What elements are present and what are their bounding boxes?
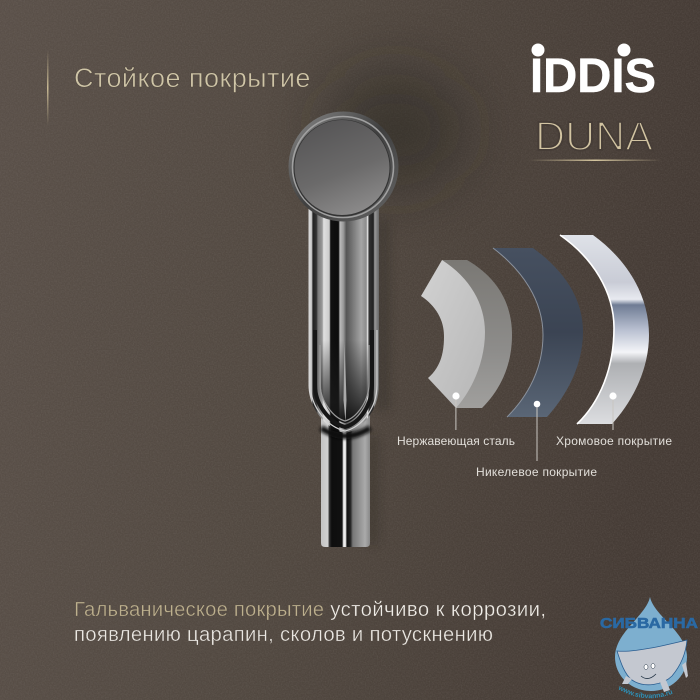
bath bbox=[617, 640, 687, 685]
drop bbox=[615, 597, 687, 691]
title accent line bbox=[47, 50, 48, 126]
url: www.sibvanna.ru bbox=[618, 686, 672, 698]
handle inner loop bbox=[320, 345, 369, 421]
layer: chrome bbox=[560, 235, 649, 424]
handle centre glint bbox=[344, 340, 346, 422]
pointer: stainless steel bbox=[452, 392, 460, 430]
description text: появлению царапин, сколов и потускнению bbox=[74, 624, 493, 646]
handle bottom core bbox=[321, 340, 369, 423]
description text bbox=[74, 599, 546, 646]
brand logo: IDDIS: IDDIS bbox=[530, 50, 656, 103]
label: nickel: Никелевое покрытие bbox=[476, 465, 597, 479]
product shadow bbox=[325, 70, 465, 545]
lower tube bbox=[321, 415, 370, 547]
head disc bbox=[294, 120, 390, 216]
shadow under handle bbox=[321, 428, 370, 436]
U-shaped handle bbox=[308, 200, 379, 433]
description text: Гальваническое покрытие устойчиво к коррозии, bbox=[74, 599, 546, 621]
bath face bbox=[641, 664, 656, 679]
product: shower head bbox=[288, 112, 398, 547]
handle outer highlight bbox=[310, 330, 377, 431]
head rim bbox=[288, 112, 398, 222]
layer: nickel bbox=[493, 248, 583, 417]
series name: DUNA: DUNA bbox=[535, 113, 653, 159]
title: Стойкое покрытие bbox=[74, 63, 311, 93]
brand name: СИБВАННА bbox=[600, 615, 698, 632]
pointer: chrome bbox=[609, 392, 617, 430]
label: stainless steel: Нержавеющая сталь bbox=[397, 434, 515, 448]
pointer: nickel bbox=[534, 401, 540, 461]
bath legs bbox=[622, 662, 688, 692]
logo divider bbox=[528, 160, 662, 161]
label: chrome: Хромовое покрытие bbox=[556, 434, 672, 448]
layer: stainless steel bbox=[421, 260, 512, 408]
watermark: Sibvanna logo bbox=[600, 597, 698, 698]
handle dark loop bbox=[315, 330, 372, 427]
